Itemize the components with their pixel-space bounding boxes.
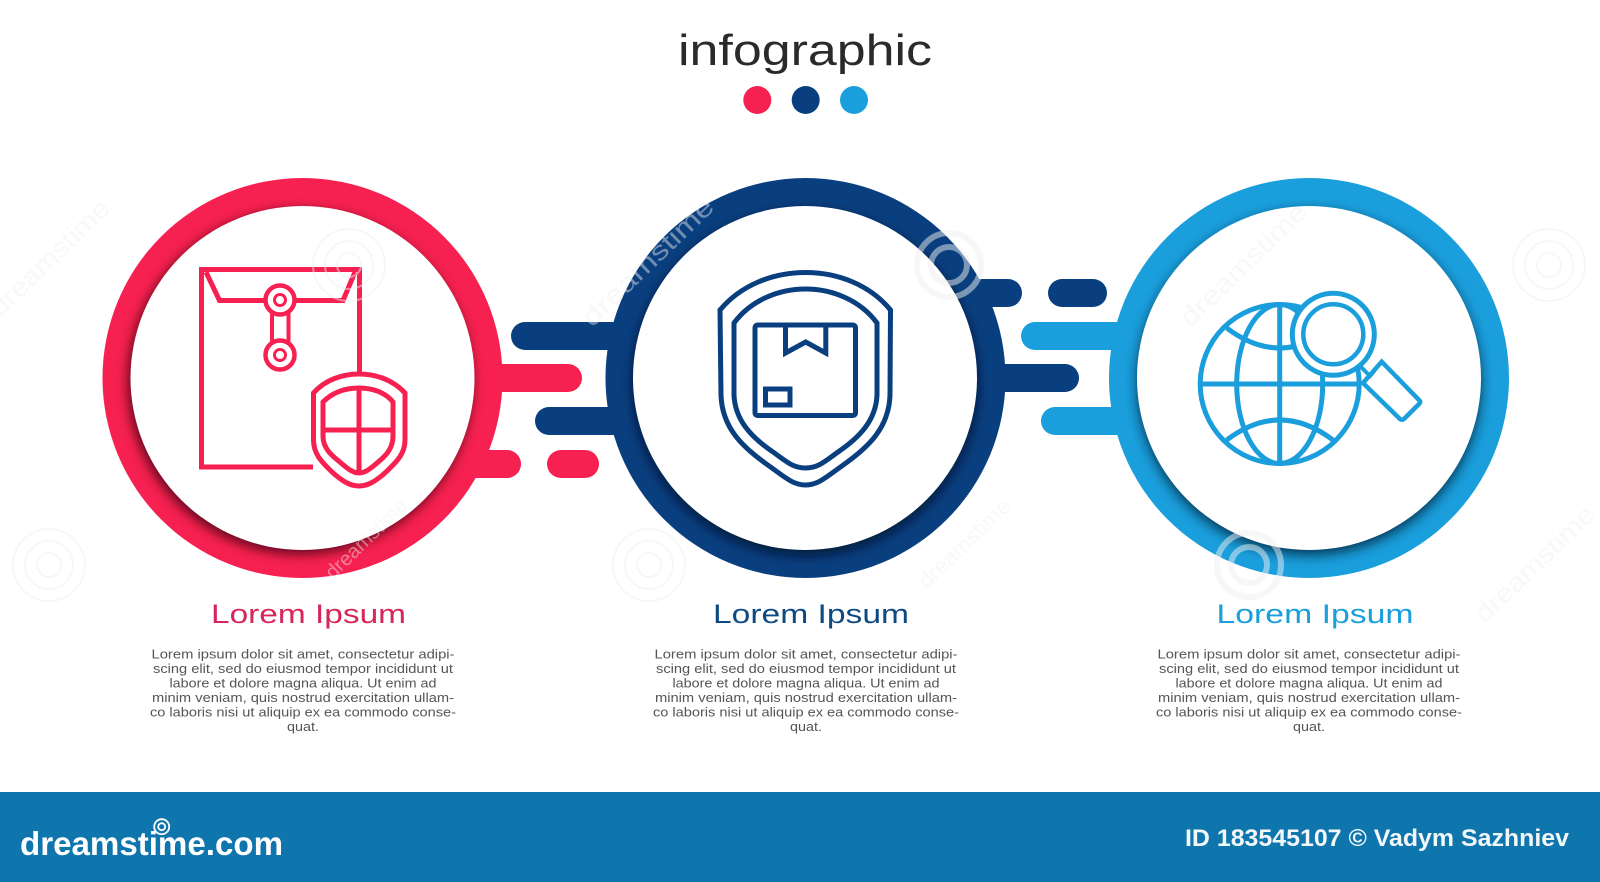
icon: logo spiral <box>154 819 169 834</box>
icon: envelope with shield <box>202 270 405 486</box>
panel: blue globe search step <box>1021 178 1509 734</box>
blue ring <box>1109 178 1509 578</box>
blue body text: scing elit, sed do eiusmod tempor incididunt ut <box>1159 662 1460 676</box>
red heading: Lorem Ipsum <box>211 599 406 629</box>
red body text: minim veniam, quis nostrud exercitation ullam- <box>152 691 454 705</box>
navy heading: Lorem Ipsum <box>713 599 909 629</box>
blue body text: Lorem ipsum dolor sit amet, consectetur adipi- <box>1158 647 1460 661</box>
footer credit: ID 183545107 © Vadym Sazhniev <box>1185 825 1570 852</box>
panel: red envelope step <box>102 178 599 734</box>
red body text <box>150 647 456 734</box>
navy body text: co laboris nisi ut aliquip ex ea commodo conse- <box>653 705 959 719</box>
watermark overlay: dreamstime <box>321 495 412 584</box>
blue body text: quat. <box>1293 720 1325 734</box>
watermark overlay: dreamstime <box>1173 196 1313 332</box>
footer bar <box>0 792 1600 882</box>
red body text: co laboris nisi ut aliquip ex ea commodo conse- <box>150 705 456 719</box>
title: infographic <box>678 26 932 75</box>
red body text: Lorem ipsum dolor sit amet, consectetur adipi- <box>152 647 454 661</box>
blue body text: minim veniam, quis nostrud exercitation ullam- <box>1158 691 1460 705</box>
red body text: scing elit, sed do eiusmod tempor incididunt ut <box>153 662 454 676</box>
navy body text: quat. <box>790 720 822 734</box>
panel: navy package shield step <box>511 178 1107 734</box>
icon: package in shield <box>720 272 890 485</box>
navy body text: labore et dolore magna aliqua. Ut enim ad <box>672 676 940 690</box>
navy body text: Lorem ipsum dolor sit amet, consectetur adipi- <box>654 647 958 661</box>
red body text: quat. <box>287 720 319 734</box>
watermark overlay: dreamstime <box>575 191 720 332</box>
watermark overlay <box>0 191 1600 628</box>
watermark overlay: dreamstime <box>913 494 1015 594</box>
blue connector bars <box>1021 322 1131 435</box>
blue body text: co laboris nisi ut aliquip ex ea commodo conse- <box>1156 705 1462 719</box>
legend dots <box>743 86 868 114</box>
blue body text: labore et dolore magna aliqua. Ut enim ad <box>1176 676 1443 690</box>
icon: globe with magnifier <box>1200 293 1420 464</box>
blue heading: Lorem Ipsum <box>1216 599 1414 629</box>
red ring <box>102 178 502 578</box>
navy body text: minim veniam, quis nostrud exercitation ullam- <box>655 691 957 705</box>
red connector bars <box>460 364 599 478</box>
blue body text <box>1156 647 1462 734</box>
footer logo: dreamstime.com <box>20 825 283 862</box>
navy connector bars <box>511 279 1107 435</box>
navy body text <box>653 647 959 734</box>
red body text: labore et dolore magna aliqua. Ut enim ad <box>170 676 437 690</box>
navy body text: scing elit, sed do eiusmod tempor incididunt ut <box>656 662 957 676</box>
watermark overlay: dreamstime <box>1468 499 1600 628</box>
navy ring <box>606 178 1006 578</box>
